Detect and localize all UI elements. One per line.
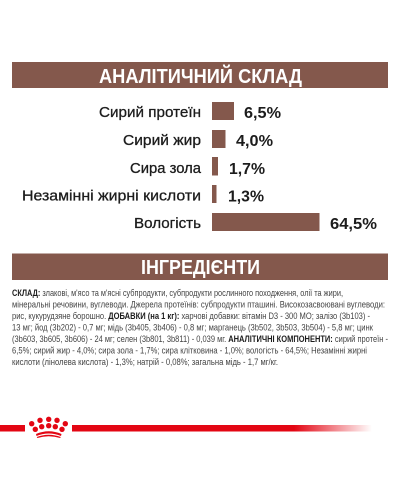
- row: crude ash: Сира зола: [130, 160, 202, 177]
- row: essential fatty acids: 1,3%: [228, 188, 264, 206]
- text block: ingredients list: кислоти (лінолева кислота) - 1,3%; натрій - 0,08%; загальна мідь - 1,7 мг/кг.: [12, 357, 278, 368]
- row: essential fatty acids: [22, 185, 264, 206]
- row: crude fat: [123, 130, 273, 150]
- row: crude ash: 1,7%: [229, 161, 265, 178]
- row: crude ash: [130, 157, 265, 178]
- row: crude protein: [99, 102, 281, 122]
- heading banner: analytical composition: АНАЛІТИЧНИЙ СКЛАД: [99, 64, 302, 88]
- panel: ingredients: [12, 254, 388, 368]
- icon: royal canin crown: [29, 417, 68, 438]
- row: moisture: [134, 213, 377, 233]
- heading banner: ingredients: ІНГРЕДІЄНТИ: [141, 257, 260, 279]
- row: moisture: Вологість: [134, 215, 201, 232]
- row: crude protein: 6,5%: [244, 105, 281, 122]
- bar chart: nutrient percentages: [22, 102, 377, 233]
- panel: analytical composition: [12, 62, 388, 233]
- heading banner: analytical composition: [12, 62, 388, 88]
- brand strip with crown logo: [0, 417, 372, 438]
- row: moisture: 64,5%: [330, 216, 377, 233]
- row: crude fat: Сирий жир: [123, 132, 201, 149]
- row: crude protein: Сирий протеїн: [99, 104, 201, 121]
- row: essential fatty acids: Незамінні жирні кислоти: [22, 188, 201, 204]
- heading banner: ingredients: [12, 254, 388, 280]
- text block: ingredients list: (3b603, 3b605, 3b606) - 24 мг; селен (3b801, 3b811) - 0,039 мг. АНАЛІТИЧНІ КОМПОНЕНТИ: сирий протеїн -: [12, 334, 388, 345]
- text block: ingredients list: [12, 288, 388, 368]
- row: crude fat: 4,0%: [236, 133, 273, 150]
